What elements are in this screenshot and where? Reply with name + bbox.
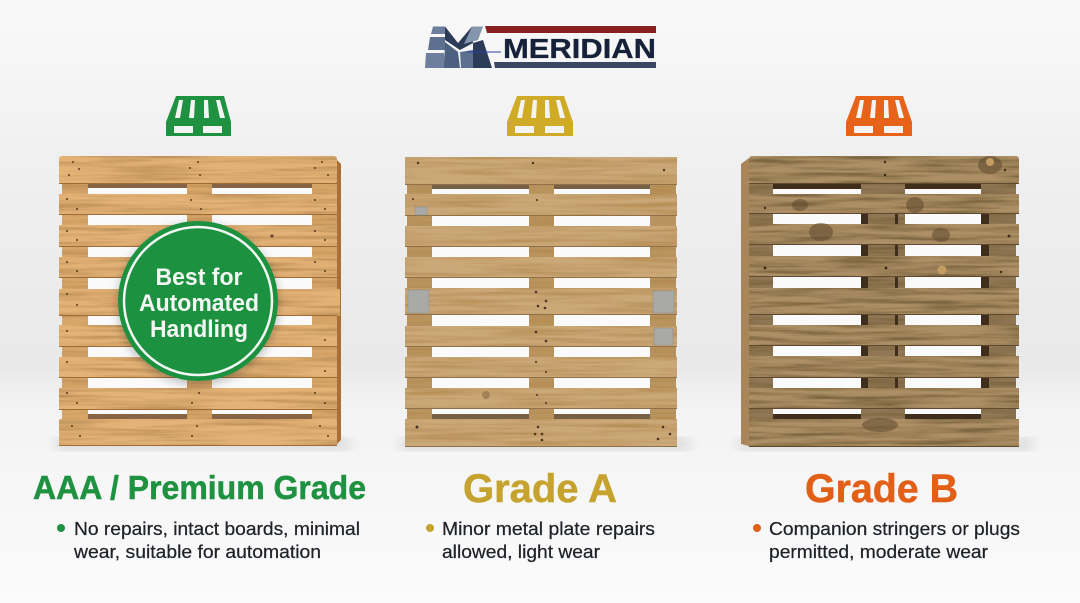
board shadows (88, 184, 312, 419)
text block: Grade B description: permitted, moderate wear (769, 541, 988, 562)
dark gaps between stringers (773, 184, 989, 419)
nails and knots (412, 162, 671, 441)
panel: Grade A pallet (405, 157, 677, 447)
icon: green pallet (166, 96, 231, 136)
logo: Meridian (425, 26, 656, 68)
badge: best for automated handling (118, 221, 278, 381)
logo mark (425, 26, 501, 68)
text block: Grade A description: Minor metal plate repairs (442, 518, 655, 539)
board shadows (432, 185, 650, 419)
logo wordmark: MERIDIAN (503, 33, 656, 64)
text block: AAA description (57, 518, 360, 562)
pallet side (335, 158, 341, 446)
floor shadows (55, 438, 1033, 450)
text block: AAA description: No repairs, intact boards, minimal (74, 518, 360, 539)
logo blue bar (494, 62, 656, 68)
badge: best for automated handling: Handling (150, 316, 248, 343)
heading: AAA / Premium Grade: AAA / Premium Grade (33, 469, 366, 506)
panel: Grade B pallet (741, 156, 1019, 447)
pallet side (741, 158, 749, 446)
badge: best for automated handling: Automated (139, 290, 259, 317)
badge: best for automated handling: Best for (156, 264, 242, 291)
nails (66, 161, 329, 437)
knots and stains (764, 156, 1010, 432)
text block: Grade A description: allowed, light wear (442, 541, 600, 562)
text block: Grade B description (753, 518, 1020, 562)
heading: Grade B: Grade B (805, 467, 958, 511)
heading: Grade A: Grade A (463, 467, 617, 511)
metal plate repairs (408, 207, 674, 345)
text block: Grade B description: Companion stringers or plugs (769, 518, 1020, 539)
panel: AAA pallet (59, 156, 341, 446)
logo red bar (485, 26, 656, 33)
icon: yellow pallet (507, 96, 573, 136)
text block: Grade A description (426, 518, 655, 562)
icon: orange pallet (846, 96, 912, 136)
text block: AAA description: wear, suitable for automation (73, 541, 321, 562)
